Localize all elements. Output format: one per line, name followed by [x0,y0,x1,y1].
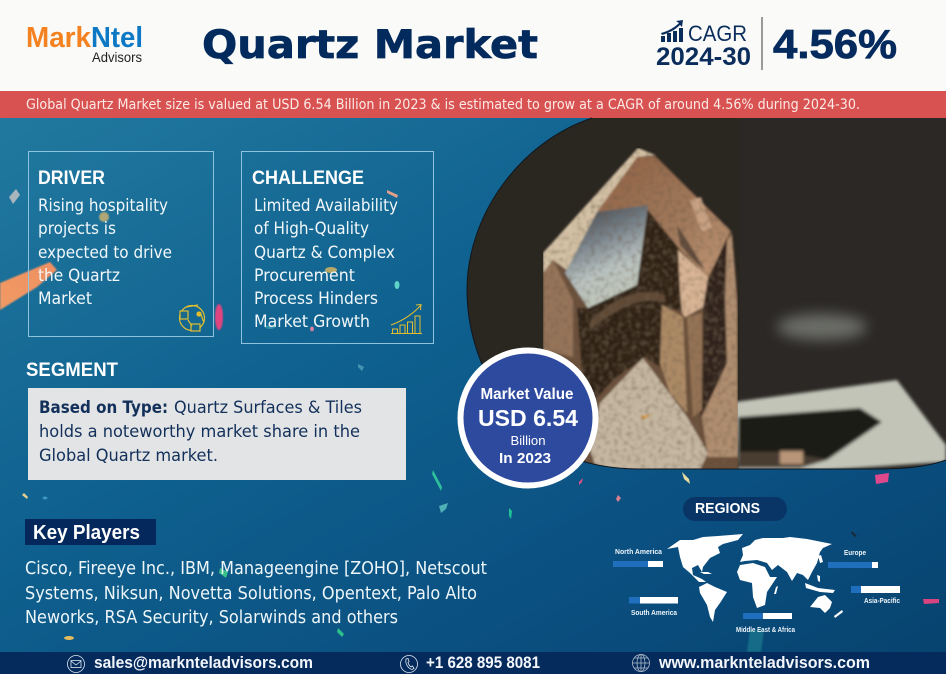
north america [613,549,663,567]
confetti decoration [0,189,939,652]
panel: challenge: Quartz & Complex [254,243,395,263]
segment heading: SEGMENT [26,360,118,381]
panel: driver: projects is [38,219,116,239]
background panel [0,118,946,652]
panel: driver: expected to drive [38,243,172,263]
north america: North America [615,549,662,556]
panel: challenge: of High-Quality [254,219,369,239]
asia-pacific: Asia-Pacific [864,598,900,605]
glow [777,314,867,340]
middle east and africa [736,613,795,634]
logo: MarkNtel Advisors: Mark [26,22,92,54]
panel: driver: the Quartz [38,266,120,286]
key players list: Neworks, RSA Security, Solarwinds and others [25,608,398,628]
panel: segment: Global Quartz market. [39,446,218,466]
footer [0,652,946,674]
key players heading: Key Players [33,522,140,544]
icon: globe with logistics [180,305,204,331]
CAGR block: CAGR [688,21,747,46]
middle east and africa: Middle East & Africa [736,627,795,634]
summary banner [0,91,946,118]
asia-pacific [851,586,900,605]
callout: market value [460,350,596,486]
panel: driver: Market [38,289,92,309]
panel: driver [28,152,214,336]
europe: Europe [844,550,866,557]
icon: growth bars [661,20,683,42]
logo: MarkNtel Advisors: Advisors [92,49,142,65]
icon: phone [400,656,418,672]
CAGR block [656,17,897,71]
title: Quartz Market [202,23,538,68]
panel: segment [28,388,406,480]
europe [828,550,878,568]
table surface [735,380,946,470]
south america: South America [631,610,677,617]
logo: MarkNtel Advisors: Ntel [91,22,143,54]
crystal [543,148,738,470]
panel: challenge: CHALLENGE [252,168,364,189]
panel: challenge: Procurement [254,266,355,286]
panel: challenge [242,152,434,344]
header band [0,0,946,91]
callout: market value: USD 6.54 [478,405,578,431]
panel: challenge: Market Growth [254,312,370,332]
panel: challenge: Limited Availability [254,196,398,216]
footer: www.marknteladvisors.com [658,654,870,672]
panel: segment: Based on Type: [39,398,168,417]
photo: quartz crystal [460,118,946,470]
icon: email [68,656,84,672]
key players list [25,559,487,628]
panel: driver: Rising hospitality [38,196,168,216]
logo: MarkNtel Advisors [26,22,143,65]
CAGR block: 2024-30 [656,43,751,71]
panel: driver: DRIVER [38,168,105,189]
summary banner: Global Quartz Market size is valued at USD 6.54 Billion in 2023 & is estimated to grow at a CAGR of around 4.56% during 2024-30. [26,97,860,113]
world map [667,534,843,622]
key players list: Systems, Niksun, Novetta Solutions, Opentext, Palo Alto [25,584,477,604]
CAGR block: 4.56% [773,21,897,67]
south america [629,597,678,617]
key players list: Cisco, Fireeye Inc., IBM, Manageengine [ZOHO], Netscout [25,559,487,579]
icon: globe [632,654,650,672]
regions heading: REGIONS [695,500,760,517]
icon: growth chart [391,304,422,334]
panel: challenge: Process Hinders [254,289,378,309]
photo outline [467,118,946,469]
footer: +1 628 895 8081 [426,654,540,672]
callout: market value: Billion [510,434,546,448]
panel: segment: holds a noteworthy market share in the [39,422,360,442]
callout: market value: In 2023 [499,450,551,467]
panel: segment: Quartz Surfaces & Tiles [174,398,362,418]
footer: sales@marknteladvisors.com [94,654,313,672]
regions heading [683,497,787,521]
callout: market value: Market Value [480,386,574,403]
region bars and labels [613,549,900,634]
